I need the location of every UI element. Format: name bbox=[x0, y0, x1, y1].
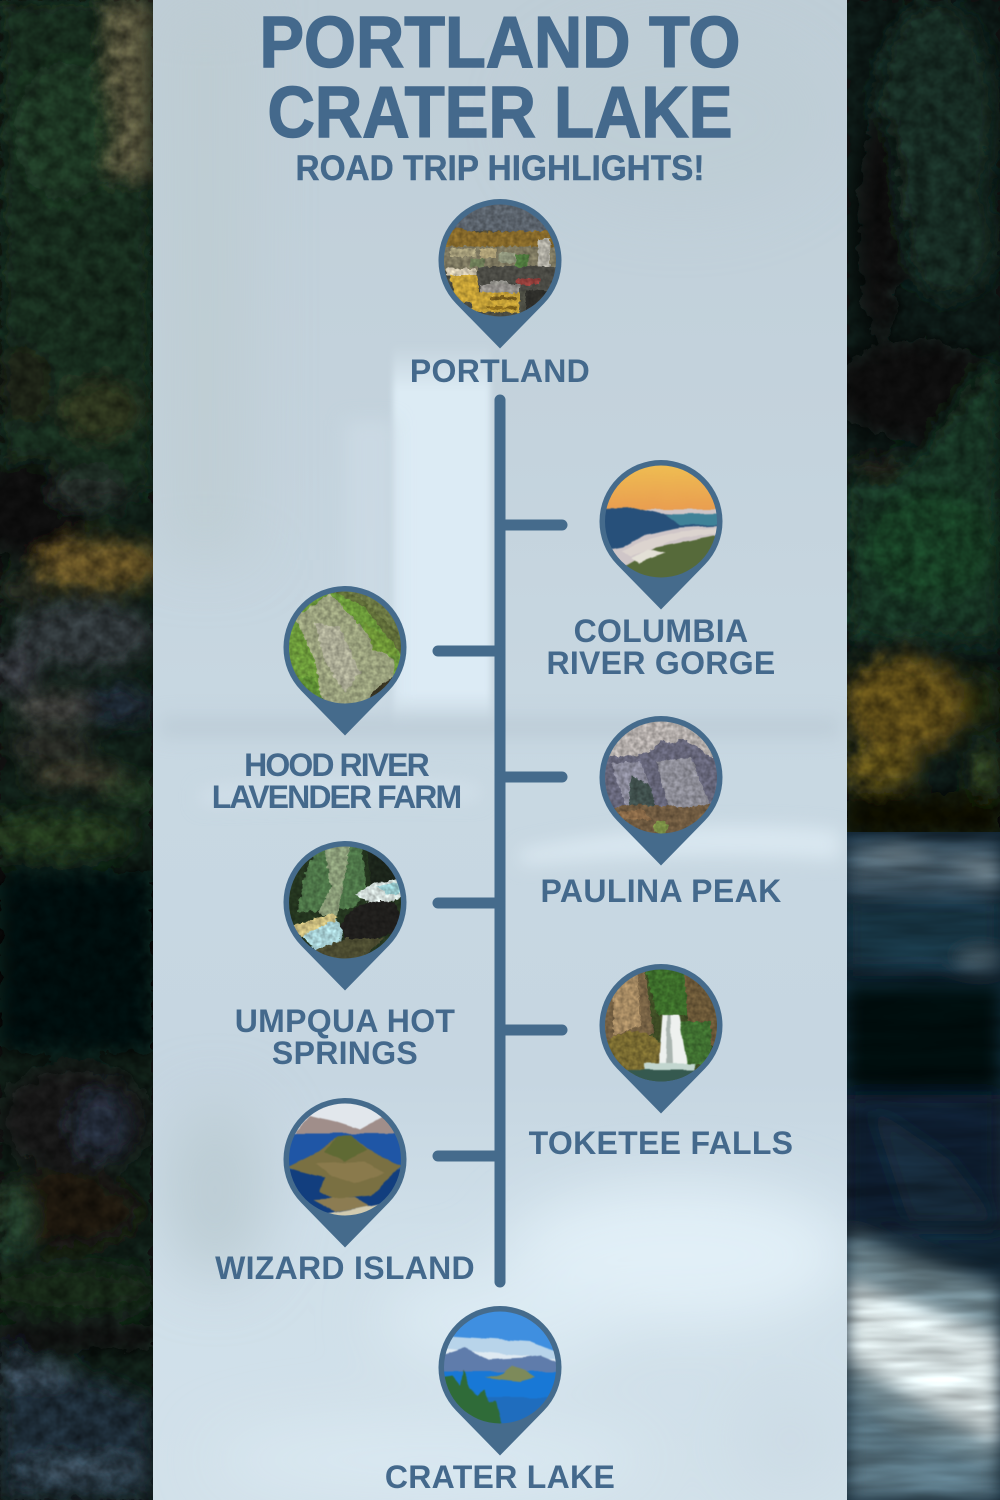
label: Hood River Lavender Farm: HOOD RIVER bbox=[244, 747, 430, 783]
pin: Wizard Island bbox=[284, 1098, 406, 1248]
pin: Hood River Lavender Farm bbox=[284, 586, 406, 736]
subtitle: ROAD TRIP HIGHLIGHTS! bbox=[296, 149, 704, 188]
timeline with branches bbox=[438, 400, 562, 1282]
label: Umpqua Hot Springs bbox=[235, 1003, 455, 1071]
pin: Toketee Falls bbox=[600, 964, 722, 1114]
label: Columbia River Gorge: COLUMBIA bbox=[574, 613, 748, 649]
label: Umpqua Hot Springs: SPRINGS bbox=[272, 1035, 418, 1071]
title: CRATER LAKE bbox=[268, 73, 732, 153]
label: Portland: PORTLAND bbox=[410, 353, 590, 389]
pin: Crater Lake bbox=[438, 1306, 562, 1456]
label: Umpqua Hot Springs: UMPQUA HOT bbox=[235, 1003, 455, 1039]
pin: Columbia River Gorge bbox=[600, 460, 722, 610]
pin: Umpqua Hot Springs bbox=[284, 841, 406, 990]
label: Paulina Peak: PAULINA PEAK bbox=[540, 873, 782, 909]
background photo: forest and river, left side bbox=[0, 0, 165, 1500]
title bbox=[260, 3, 740, 153]
pin: Paulina Peak bbox=[600, 716, 722, 866]
label: Columbia River Gorge: RIVER GORGE bbox=[546, 645, 776, 681]
label: Wizard Island: WIZARD ISLAND bbox=[215, 1250, 475, 1286]
title: PORTLAND TO bbox=[260, 3, 740, 83]
label: Hood River Lavender Farm bbox=[212, 747, 460, 815]
pin: Portland bbox=[438, 199, 562, 348]
background photo: rushing river, right side bbox=[847, 832, 1000, 1500]
label: Hood River Lavender Farm: LAVENDER FARM bbox=[212, 779, 460, 815]
label: Toketee Falls: TOKETEE FALLS bbox=[529, 1125, 793, 1161]
central translucent panel with misty waterfall bbox=[153, 0, 850, 1500]
background photo: forest, mossy boulders, right side bbox=[835, 0, 1000, 836]
label: Columbia River Gorge bbox=[546, 613, 776, 681]
label: Crater Lake: CRATER LAKE bbox=[385, 1459, 615, 1495]
